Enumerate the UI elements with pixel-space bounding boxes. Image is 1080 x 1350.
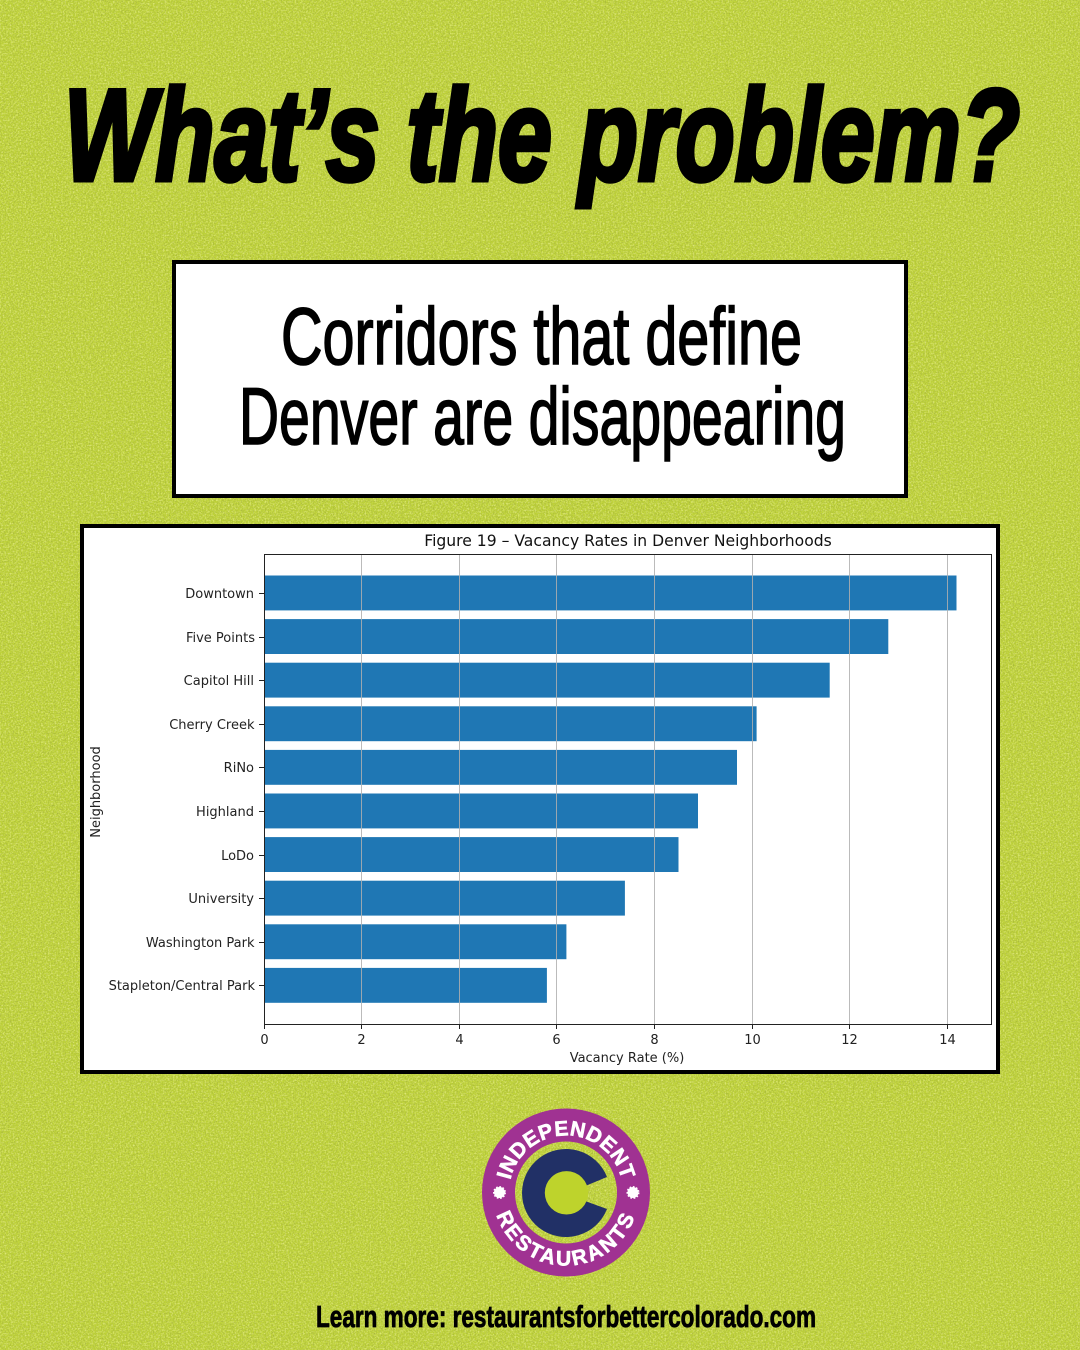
badge text — [496, 1120, 636, 1266]
chart title: Figure 19 – Vacancy Rates in Denver Neighborhoods — [424, 532, 832, 550]
footer link text: Learn more: restaurantsforbettercolorado.com — [316, 1299, 816, 1334]
x axis tick labels: 6 — [552, 1033, 561, 1048]
x axis label: Vacancy Rate (%) — [570, 1051, 684, 1066]
panel: headline box — [174, 262, 906, 496]
x axis tick labels: 2 — [357, 1033, 366, 1048]
neighborhood labels: Cherry Creek — [169, 718, 255, 733]
neighborhood labels: Downtown — [185, 587, 254, 602]
bars — [264, 576, 956, 1003]
headline text — [239, 292, 846, 462]
badge ring — [482, 1108, 650, 1276]
star dots — [494, 1187, 638, 1198]
neighborhood labels: Stapleton/Central Park — [109, 979, 255, 994]
neighborhood labels: Washington Park — [146, 936, 255, 951]
C centre — [545, 1171, 588, 1215]
headline text: Corridors that define — [281, 292, 802, 382]
neighborhood labels: University — [188, 892, 254, 907]
neighborhood labels: RiNo — [224, 761, 254, 776]
panel: vacancy chart — [82, 526, 998, 1072]
x axis tick labels: 0 — [260, 1033, 269, 1048]
x axis tick labels: 14 — [939, 1033, 956, 1048]
x axis tick labels: 10 — [744, 1033, 761, 1048]
x axis tick labels: 8 — [650, 1033, 659, 1048]
y axis label: Neighborhood — [89, 746, 104, 838]
x axis tick labels: 4 — [455, 1033, 464, 1048]
badge text: INDEPENDENT — [496, 1120, 636, 1180]
bar chart — [89, 554, 992, 1066]
neighborhood labels: Five Points — [186, 631, 255, 646]
x axis tick labels: 12 — [841, 1033, 858, 1048]
colorado C — [522, 1149, 607, 1237]
neighborhood labels: Highland — [196, 805, 254, 820]
neighborhood labels: LoDo — [221, 849, 254, 864]
x axis tick labels — [260, 1033, 956, 1048]
neighborhood labels — [109, 587, 255, 994]
neighborhood labels: Capitol Hill — [184, 674, 254, 689]
logo: independent restaurants badge — [482, 1108, 650, 1276]
badge text: RESTAURANTS — [496, 1210, 634, 1266]
